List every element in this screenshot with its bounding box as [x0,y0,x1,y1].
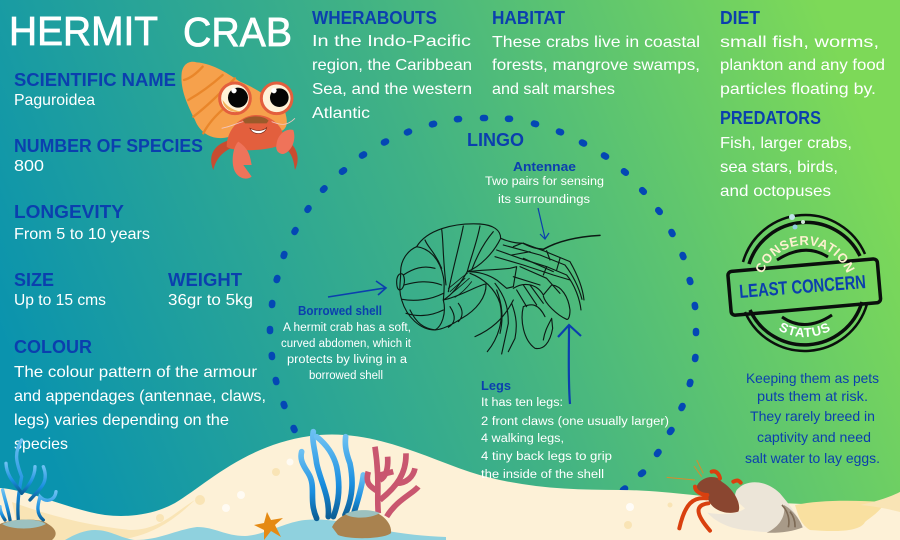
left column facts: legs) varies depending on the [14,412,229,429]
pink coral [367,447,418,517]
left column facts: SCIENTIFIC NAME [14,70,176,90]
habitat block: HABITAT [492,8,565,28]
water pool [65,519,446,540]
conservation status stamp: LEAST CONCERN [738,272,867,303]
left column facts: Up to 15 cms [14,292,106,309]
antennae label: Antennae [513,160,576,174]
left column facts: and appendages (antennae, claws, [14,388,266,405]
habitat block: forests, mangrove swamps, [492,57,700,74]
arrow: antennae [538,208,549,239]
diet block: plankton and any food [720,57,885,74]
pet warning text: They rarely breed in [750,408,875,424]
legs label: Legs [481,379,511,393]
diet block: small fish, worms, [720,34,879,51]
predators block: PREDATORS [720,108,821,128]
wherabouts block: Sea, and the western [312,81,472,98]
diet block: particles floating by. [720,81,876,98]
borrowed shell label: borrowed shell [309,370,383,382]
legs label: 2 front claws (one usually larger) [481,416,669,428]
lingo heading: LINGO [467,130,524,150]
legs label: 4 walking legs, [481,433,564,445]
borrowed shell label: protects by living in a [287,354,408,366]
center rock [332,510,391,538]
title [9,8,292,55]
left column facts: From 5 to 10 years [14,226,150,243]
antennae label: its surroundings [498,194,590,206]
predators block: Fish, larger crabs, [720,135,852,152]
legs label: It has ten legs: [481,397,563,409]
starfish [254,512,283,540]
conservation status stamp [726,214,882,352]
pet warning text: Keeping them as pets [746,370,879,386]
left rock [0,519,56,540]
conservation status stamp: CONSERVATION [756,236,855,273]
borrowed shell label: A hermit crab has a soft, [283,322,411,334]
antennae label [485,160,604,206]
diet block: DIET [720,8,760,28]
borrowed shell label [281,304,412,382]
antennae label: Two pairs for sensing [485,176,604,188]
sand dunes [0,435,900,540]
diet block [720,8,885,98]
left column facts: COLOUR [14,337,92,357]
wherabouts block [312,8,472,122]
pet warning text: captivity and need [757,429,871,445]
title: HERMIT [9,8,158,54]
left column facts [14,70,266,453]
left column facts: The colour pattern of the armour [14,364,258,381]
arrow: borrowed shell [328,281,386,297]
dotted circle [270,118,696,490]
left column facts: WEIGHT [168,270,242,290]
left column facts: 800 [14,158,44,175]
pet warning text: salt water to lay eggs. [745,450,880,466]
legs label [481,379,669,481]
habitat block [492,8,700,98]
hermit crab photo illustration [667,460,803,533]
predators block: sea stars, birds, [720,159,838,176]
title: CRAB [183,9,292,55]
left seaweed [0,440,56,520]
left column facts: Paguroidea [14,92,95,109]
borrowed shell label: Borrowed shell [298,304,382,318]
wherabouts block: In the Indo-Pacific [312,33,471,50]
left column facts: NUMBER OF SPECIES [14,136,203,156]
habitat block: These crabs live in coastal [492,34,700,51]
center blue seaweed [301,432,363,518]
legs label: 4 tiny back legs to grip [481,451,612,463]
legs label: the inside of the shell [481,469,604,481]
engraved crab illustration [397,224,600,354]
left column facts: 36gr to 5kg [168,292,253,309]
icon: cartoon hermit crab [181,62,298,179]
wherabouts block: Atlantic [312,105,370,122]
borrowed shell label: curved abdomen, which it [281,338,412,350]
pet warning text [745,370,880,466]
left column facts: species [14,436,68,453]
predators block [720,108,852,200]
left column facts: LONGEVITY [14,202,124,222]
wherabouts block: WHERABOUTS [312,8,437,28]
left column facts: SIZE [14,270,54,290]
predators block: and octopuses [720,183,831,200]
arrow: legs [558,325,581,404]
pet warning text: puts them at risk. [757,388,868,404]
conservation status stamp: STATUS [779,323,830,338]
habitat block: and salt marshes [492,81,615,98]
wherabouts block: region, the Caribbean [312,57,472,74]
